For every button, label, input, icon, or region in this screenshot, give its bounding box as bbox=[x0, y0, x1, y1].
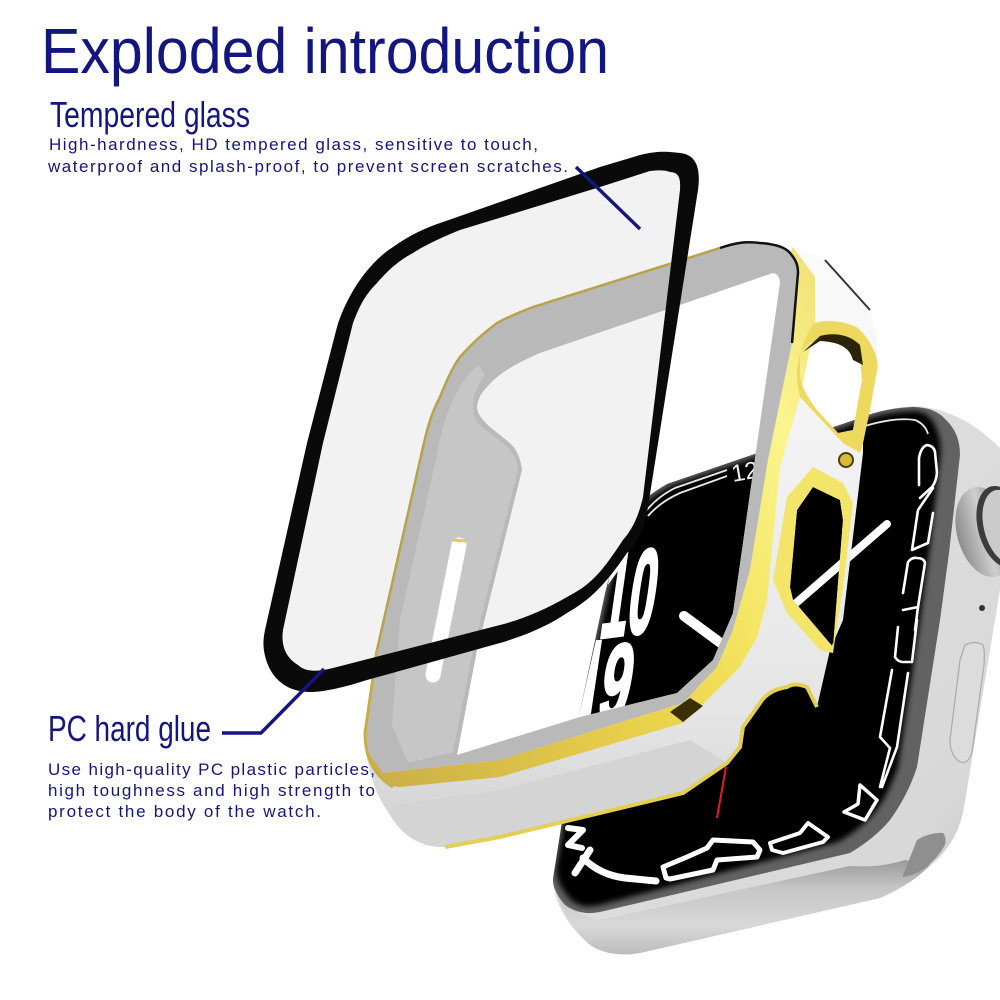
side button bbox=[950, 642, 984, 763]
case left-bottom shading bbox=[390, 740, 727, 847]
callout line: PC hard glue bbox=[222, 669, 324, 733]
pill cutout gold rim bbox=[773, 467, 853, 653]
casing groove shadow bbox=[903, 833, 946, 877]
description: PC hard glue bbox=[48, 760, 375, 821]
gold rim wide band bbox=[366, 247, 815, 787]
dial number 9: 9 bbox=[591, 619, 644, 746]
dial number 12: 12 bbox=[729, 457, 760, 488]
bottom outlined numerals bbox=[568, 785, 877, 881]
dial number 10: 10 bbox=[594, 522, 667, 664]
display bezel bbox=[553, 407, 960, 913]
description: PC hard glue: high toughness and high strength to bbox=[48, 781, 375, 800]
lighter inner wall highlight bbox=[392, 365, 518, 763]
digital crown bbox=[946, 480, 1000, 584]
callout line: tempered glass bbox=[576, 167, 640, 229]
heading: PC hard glue: PC hard glue bbox=[48, 708, 211, 749]
hour hands bbox=[684, 524, 887, 818]
title: Exploded introduction bbox=[41, 15, 609, 87]
watch silver casing bbox=[553, 406, 1000, 954]
apple watch body bbox=[545, 406, 1000, 954]
sensor pin bbox=[839, 453, 853, 467]
dark edge of shell top bbox=[825, 260, 870, 310]
case grey inner wall bbox=[365, 242, 798, 773]
case white shell bbox=[365, 242, 877, 847]
heading: tempered glass: Tempered glass bbox=[50, 94, 250, 135]
right side outlined numerals bbox=[880, 445, 937, 787]
black edge of rim top bbox=[720, 242, 798, 343]
tempered glass pane fill bbox=[283, 170, 680, 671]
display black bbox=[556, 411, 940, 906]
microphone hole bbox=[979, 605, 985, 611]
tempered glass black frame bbox=[263, 152, 699, 692]
description: tempered glass: waterproof and splash-proof, to prevent screen scratches. bbox=[47, 157, 568, 176]
lower shaded casing bbox=[553, 860, 930, 954]
PC protective case bbox=[365, 242, 878, 847]
left outer digit strip bbox=[578, 640, 602, 720]
description: PC hard glue: Use high-quality PC plastic particles, bbox=[48, 760, 375, 779]
gold rim thin top and left edge bbox=[377, 248, 720, 650]
white left sliver of screen bbox=[545, 525, 622, 878]
description: PC hard glue: protect the body of the watch. bbox=[48, 802, 321, 821]
inner slot bbox=[433, 540, 466, 675]
teardrop cutout gold rim bbox=[797, 321, 878, 453]
dial arcs bbox=[643, 419, 928, 516]
dark gold reflection bbox=[670, 698, 703, 722]
description: tempered glass: High-hardness, HD tempered glass, sensitive to touch, bbox=[49, 135, 538, 154]
gold lower outer edge bbox=[445, 684, 817, 847]
gold left bottom corner bbox=[365, 650, 393, 787]
teardrop dark reflection bbox=[803, 334, 863, 365]
description: tempered glass bbox=[47, 135, 568, 176]
